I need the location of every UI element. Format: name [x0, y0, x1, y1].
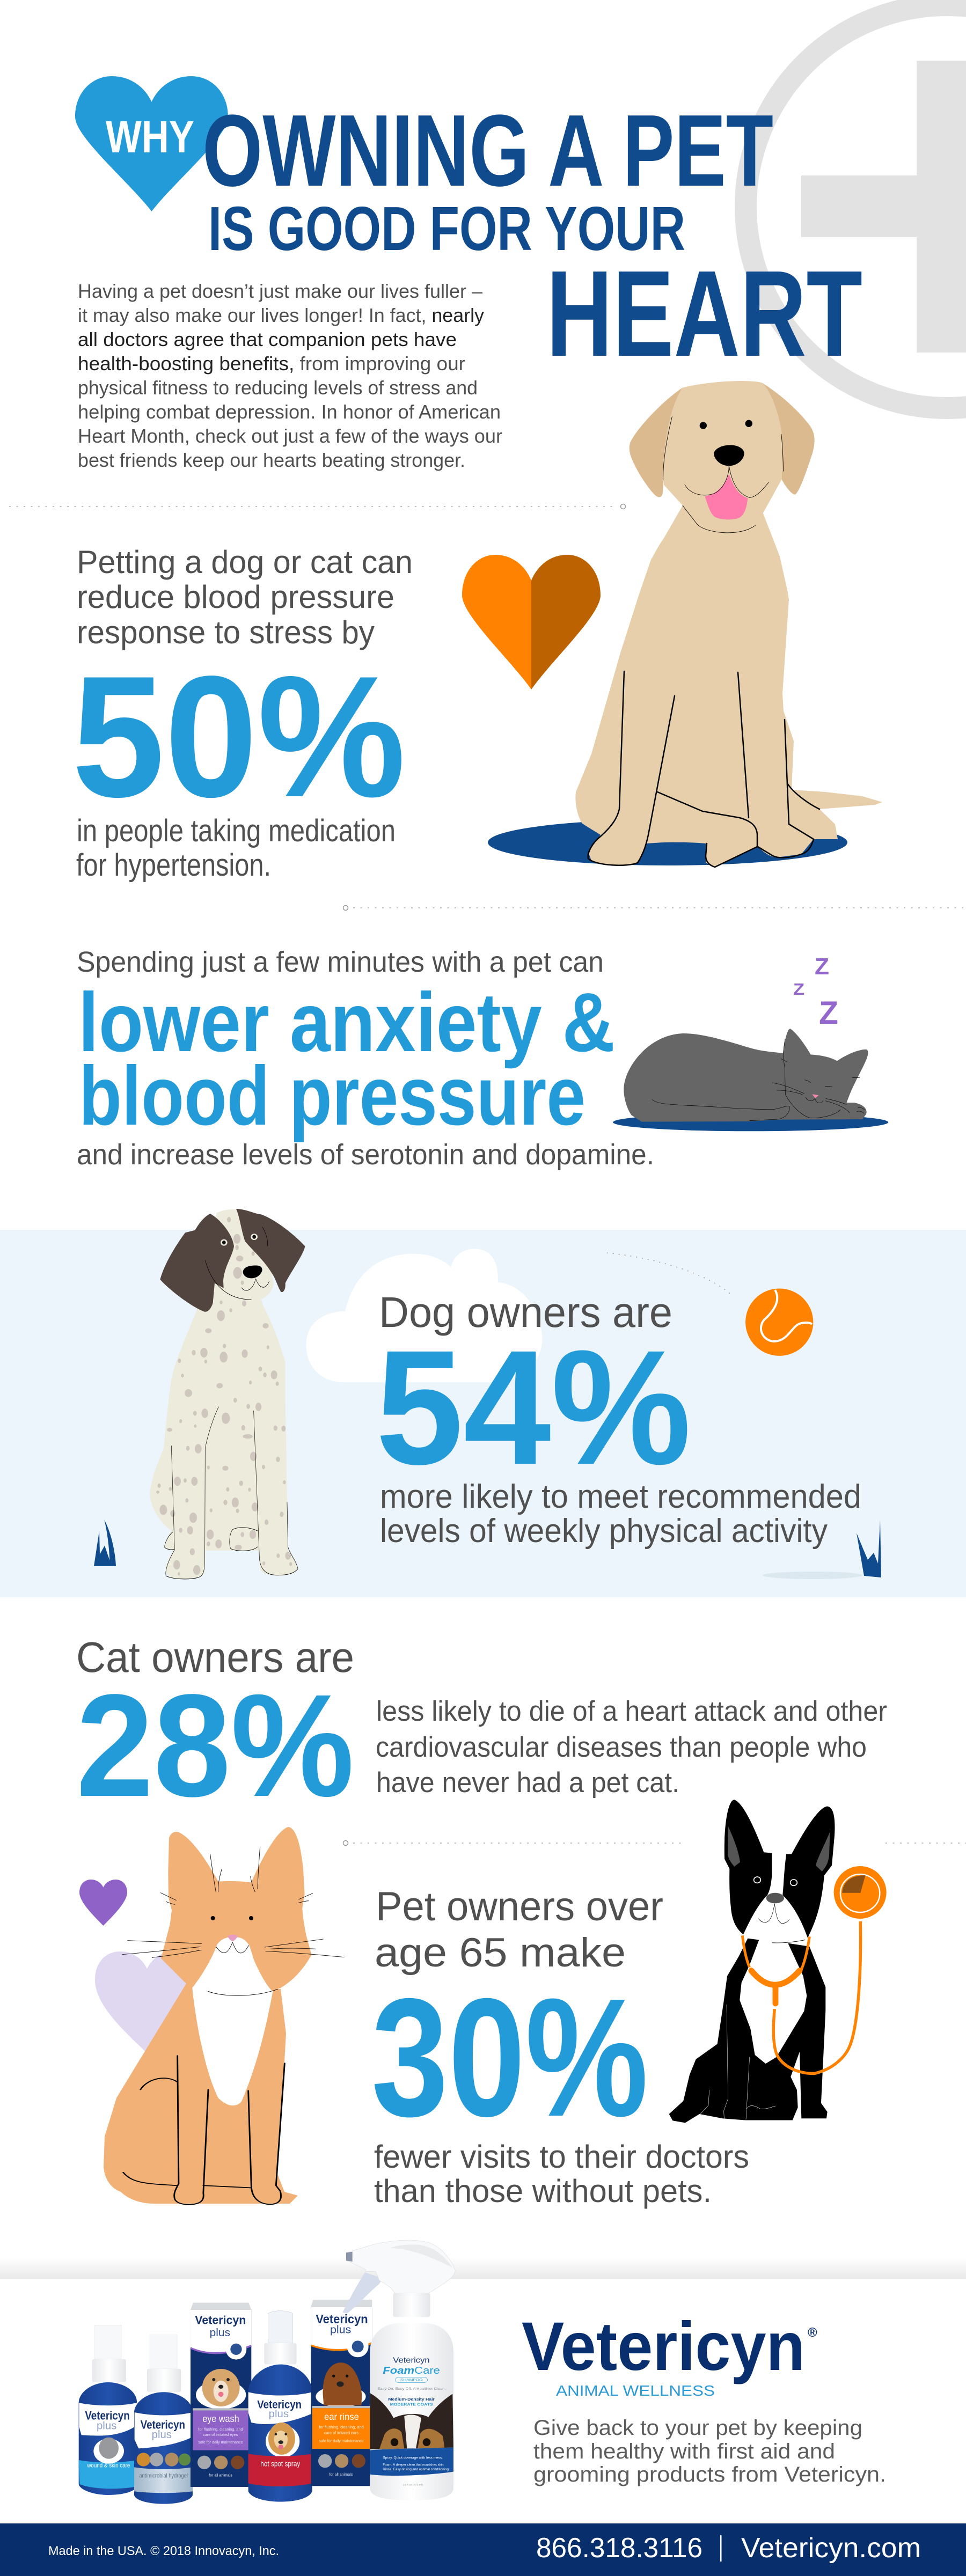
cat line work — [123, 2056, 284, 2205]
cat lower body — [104, 1984, 298, 2204]
product: ear rinse box: for flushing, cleaning, and — [319, 2425, 364, 2430]
intro paragraph: it may also make our lives longer! In fact, nearly — [78, 304, 484, 326]
product: ear rinse box: safe for daily maintenance — [319, 2438, 364, 2443]
lead-in text — [375, 1884, 663, 1976]
follow-up text: more likely to meet recommended — [380, 1478, 861, 1515]
panel: dog owners activity — [0, 1209, 966, 1597]
lead-in text — [77, 544, 413, 650]
dog body — [150, 1209, 298, 1579]
product: ear rinse box: Vetericyn — [316, 2312, 368, 2326]
cat body — [624, 1029, 868, 1122]
panel background — [0, 1230, 966, 1597]
product: eye wash box: for all animals — [209, 2473, 232, 2478]
intro paragraph: physical fitness to reducing levels of stress and — [78, 377, 478, 399]
footer product band — [0, 2257, 966, 2279]
product: eye wash box: plus — [210, 2327, 230, 2339]
icon: blue heart — [75, 76, 228, 211]
follow-up text: have never had a pet cat. — [376, 1767, 679, 1799]
website: Vetericyn.com — [741, 2533, 921, 2564]
product: eye wash box — [191, 2303, 251, 2487]
product call to action text: grooming products from Vetericyn. — [533, 2463, 886, 2486]
product: foamcare spray bottle: Vetericyn — [393, 2356, 430, 2365]
product: hot spot spray bottle: Vetericyn — [257, 2398, 302, 2411]
follow-up text — [376, 1696, 887, 1799]
follow-up text: less likely to die of a heart attack and other — [376, 1696, 887, 1727]
big number 30%: 30% — [371, 1963, 648, 2152]
wordmark: Vetericyn — [522, 2308, 805, 2385]
mat — [613, 1113, 888, 1131]
stat: cat owners heart attack — [76, 1633, 887, 1827]
follow-up text — [76, 813, 396, 883]
dog body — [669, 1939, 828, 2123]
product: foamcare spray bottle: Rinse. Easy rinsing and optimal conditioning — [383, 2468, 449, 2471]
illustration: sleeping grey cat — [613, 1029, 888, 1131]
big number 54%: 54% — [376, 1317, 691, 1499]
line work — [165, 1227, 298, 1579]
product: hot spot spray bottle: hot spot spray — [260, 2460, 300, 2468]
product lineup — [79, 2240, 455, 2504]
white bib — [192, 1937, 273, 2105]
product: eye wash box: for flushing, cleaning, and — [198, 2427, 243, 2432]
dog spots — [156, 1217, 292, 1576]
eyes — [754, 1877, 797, 1885]
intro paragraph: helping combat depression. In honor of American — [78, 401, 501, 423]
product: ear rinse box: plus — [330, 2323, 351, 2336]
right ear — [762, 383, 815, 495]
ball trajectory — [607, 1253, 732, 1295]
big number 50%: 50% — [72, 641, 406, 833]
whiskers and face lines — [122, 1847, 345, 1995]
product: wound and skin care bottle — [79, 2325, 137, 2495]
follow-up text: and increase levels of serotonin and dopamine. — [77, 1139, 654, 1171]
icon: sleeping z letters: Z — [793, 980, 804, 999]
intro paragraph: health-boosting benefits, from improving our — [78, 353, 465, 375]
icon: small purple heart — [79, 1880, 127, 1926]
dog body — [575, 505, 882, 867]
cat head — [161, 1827, 312, 1991]
intro paragraph — [78, 280, 502, 471]
product: ear rinse box: for all animals — [329, 2472, 353, 2477]
grass tuft left — [94, 1520, 116, 1566]
stat: pet owners over 65 — [371, 1884, 749, 2209]
product: hot spot spray bottle — [248, 2311, 312, 2502]
product: eye wash box: eye wash — [202, 2413, 239, 2424]
lead-in text: response to stress by — [77, 614, 375, 650]
lead-in text: Cat owners are — [76, 1633, 354, 1681]
cloud — [306, 1249, 542, 1382]
product: ear rinse box: care of irritated ears — [324, 2431, 358, 2435]
highlight line 1: lower anxiety & — [78, 976, 615, 1069]
intro paragraph: Having a pet doesn’t just make our lives fuller – — [78, 280, 482, 302]
illustration: boston terrier with stethoscope — [669, 1800, 887, 2123]
product: foamcare spray bottle: Foam. A deeper clean that nourishes skin — [383, 2463, 444, 2467]
big number 28%: 28% — [76, 1664, 354, 1827]
nose — [766, 1893, 784, 1903]
header title — [75, 76, 862, 382]
follow-up text: levels of weekly physical activity — [380, 1513, 828, 1550]
product: foamcare spray bottle: Medium-Density Hair — [388, 2397, 435, 2402]
follow-up text: fewer visits to their doctors — [374, 2139, 749, 2175]
product: foamcare spray bottle: FoamCare — [383, 2365, 440, 2376]
stat: petting reduces blood pressure response — [72, 544, 413, 883]
product: wound and skin care bottle: plus — [97, 2420, 116, 2432]
icon: sleeping z letters: Z — [819, 995, 838, 1031]
icon: sleeping z letters — [793, 953, 838, 1031]
line work — [758, 1904, 805, 1943]
tagline: ANIMAL WELLNESS — [556, 2382, 715, 2399]
product: foamcare spray bottle: Easy On, Easy Off. A Healthier Clean. — [377, 2387, 446, 2391]
grass tuft right — [857, 1520, 881, 1577]
follow-up text: in people taking medication — [77, 813, 396, 848]
product: eye wash box: safe for daily maintenance — [198, 2440, 243, 2445]
eyes — [211, 1916, 253, 1920]
vetericyn logo — [522, 2308, 817, 2399]
product: wound and skin care bottle: Vetericyn — [85, 2409, 130, 2422]
intro paragraph: all doctors agree that companion pets have — [78, 328, 457, 350]
product: antimicrobial hydrogel bottle: antimicrobial hydrogel — [139, 2472, 188, 2479]
footer bar — [0, 2523, 966, 2576]
icon: large lilac heart — [95, 1951, 199, 2053]
head left patch — [724, 1800, 772, 1934]
lead-in text: Dog owners are — [379, 1288, 672, 1336]
follow-up text — [380, 1478, 861, 1550]
ground shadow — [763, 1572, 862, 1579]
product: foamcare spray bottle: MODERATE COATS — [390, 2402, 433, 2406]
stat: lower anxiety and blood pressure — [77, 946, 654, 1171]
product call to action text — [533, 2416, 886, 2486]
product: hot spot spray bottle: plus — [269, 2409, 289, 2420]
follow-up text: cardiovascular diseases than people who — [376, 1731, 867, 1763]
left ear patch — [160, 1214, 234, 1312]
illustration: spotted dog — [150, 1209, 305, 1579]
lead-in text: Petting a dog or cat can — [77, 544, 413, 580]
stethoscope — [742, 1866, 887, 2074]
product: wound and skin care bottle: wound & skin care — [86, 2463, 130, 2469]
nose — [228, 1935, 238, 1941]
product: foamcare spray bottle: Spray. Quick coverage with less mess. — [383, 2457, 443, 2460]
cat line work — [652, 1039, 865, 1121]
product call to action text: them healthy with first aid and — [533, 2440, 835, 2463]
decorative medical cross in ring — [746, 5, 966, 408]
product: foamcare spray bottle — [342, 2240, 455, 2500]
lead-in text: reduce blood pressure — [77, 579, 394, 615]
highlight line 2: blood pressure — [79, 1050, 586, 1143]
product: foamcare spray bottle: 16 fl oz (473 ml) — [403, 2483, 423, 2486]
nose — [812, 1094, 818, 1098]
icon: tennis ball — [745, 1288, 813, 1356]
product: foamcare spray bottle: SHAMPOO — [400, 2379, 422, 2382]
nose — [243, 1265, 262, 1278]
intro paragraph: best friends keep our hearts beating stronger. — [78, 449, 465, 471]
right ear patch — [236, 1209, 305, 1292]
product: eye wash box: care of irritated eyes — [203, 2432, 238, 2437]
head right patch — [782, 1807, 835, 1937]
follow-up text: than those without pets. — [374, 2173, 712, 2209]
icon: orange two-tone heart — [462, 555, 601, 689]
dog body line work — [588, 671, 819, 867]
heading word: why: WHY — [106, 112, 194, 162]
product: ear rinse box — [311, 2300, 372, 2486]
lead-in text: age 65 make — [375, 1930, 626, 1976]
registered mark: ® — [808, 2325, 817, 2340]
icon: sleeping z letters: Z — [815, 953, 829, 980]
copyright: Made in the USA. © 2018 Innovacyn, Inc. — [48, 2544, 279, 2558]
follow-up text: for hypertension. — [76, 848, 271, 883]
heading word: heart: HEART — [546, 246, 862, 382]
illustration: sitting golden dog — [488, 381, 882, 867]
heading line: is good for your: IS GOOD FOR YOUR — [208, 194, 685, 263]
inner ears — [728, 1826, 830, 1872]
product: antimicrobial hydrogel bottle: plus — [152, 2429, 172, 2441]
product call to action text: Give back to your pet by keeping — [533, 2416, 862, 2440]
follow-up text — [374, 2139, 749, 2209]
illustration: orange and white cat — [104, 1827, 345, 2205]
product: ear rinse box: ear rinse — [324, 2411, 359, 2422]
phone number: 866.318.3116 — [536, 2533, 702, 2564]
lead-in text: Pet owners over — [376, 1884, 663, 1929]
product: eye wash box: Vetericyn — [195, 2314, 246, 2327]
heading line: owning a pet: OWNING A PET — [202, 94, 773, 208]
intro paragraph: Heart Month, check out just a few of the ways our — [78, 425, 502, 447]
product: antimicrobial hydrogel bottle — [134, 2335, 193, 2504]
lead-in text: Spending just a few minutes with a pet can — [77, 946, 604, 978]
left ear — [630, 388, 683, 497]
eyes — [221, 1234, 258, 1246]
mat — [488, 819, 847, 865]
dog face — [663, 381, 784, 537]
product: antimicrobial hydrogel bottle: Vetericyn — [141, 2418, 185, 2432]
separator — [720, 2535, 721, 2562]
